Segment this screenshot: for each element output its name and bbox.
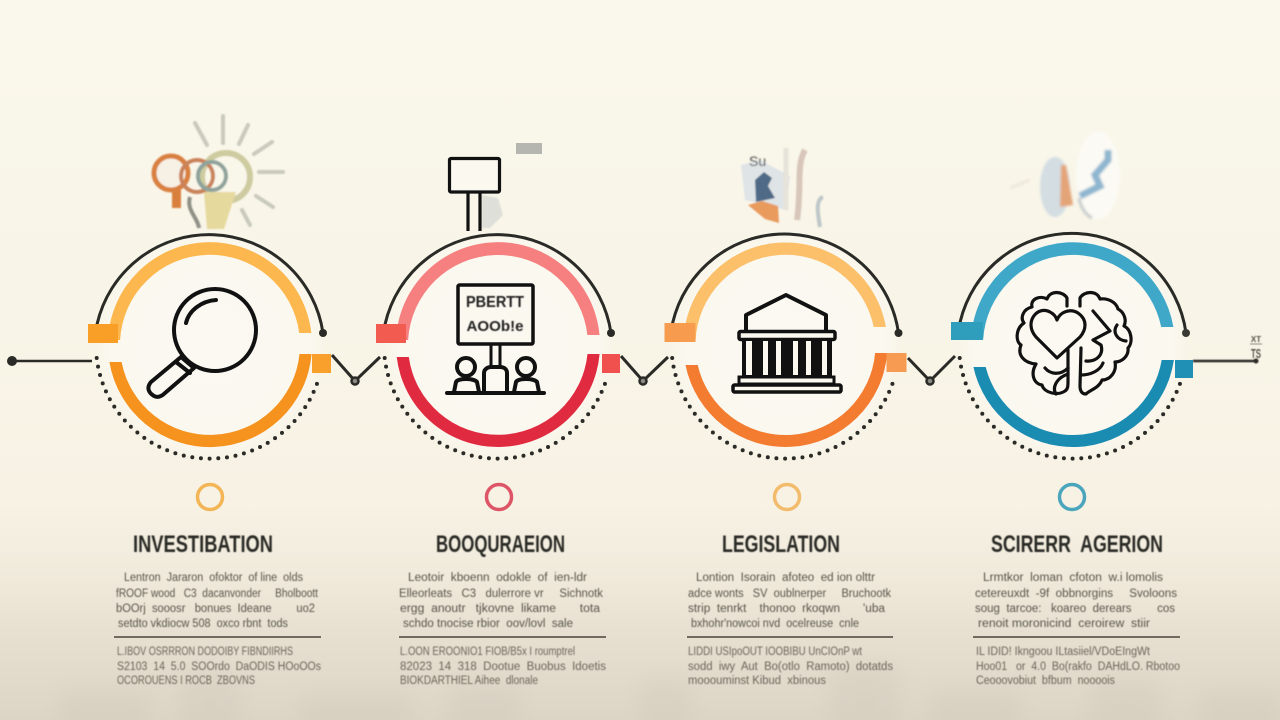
connector 1 to 2 [332,355,380,384]
icon: brain with heart [1017,292,1131,394]
right timeline end: XT [1251,335,1261,344]
footnote text: Hoo01 or 4.0 Bo(rakfo DAHdLO. Rbotoo [976,661,1180,673]
panel: scientific stage [951,229,1193,687]
icon: magnifying glass [148,289,256,397]
marker ring [198,484,222,510]
marker ring [486,484,512,510]
icon: placard and audience: AOOb!e [466,318,524,335]
footnote text: S2103 14 5.0 SOOrdo DaODIS HOoOOs [117,661,321,673]
hazy skyline [60,665,1280,720]
panel: legislation stage [664,229,906,687]
decoration: collage of figures [741,148,823,227]
ring: scientific [951,229,1193,461]
body text: bxhohr'nowcoi nvd ocelreuse cnle [691,618,859,630]
ring: education [376,229,620,461]
panel: education stage [376,229,620,687]
footnote text [400,646,606,687]
footnote text: Ceooovobiut bfbum noooois [976,675,1115,687]
footnote text: IL IDID! Ikngoou ILtasiiel/VDoEIngWt [976,646,1151,658]
panel: investigation stage [88,229,331,687]
body text: Lentron Jararon ofoktor of line olds [124,572,303,584]
footnote text [976,646,1180,687]
marker ring [1060,484,1084,510]
icon: government building [733,295,841,392]
body text: setdto vkdiocw 508 oxco rbnt tods [118,618,288,630]
footnote text: L.OON EROONIO1 FIOB/B5x I roumptrel [400,646,575,658]
connector 2 to 3 [621,356,668,384]
heading: BOOQURAEION [436,531,565,558]
decoration: collage of figures: Su [749,153,766,169]
body text [688,572,891,630]
body text: adce wonts SV oublnerper Bruchootk [688,588,891,600]
heading: INVESTIBATION [133,531,273,558]
body text: schdo tnocise rbior oov/lovl sale [403,618,573,630]
body text [116,572,319,630]
footnote text: 82023 14 318 Dootue Buobus Idoetis [400,661,606,673]
heading: SCIRERR AGERION [991,531,1163,558]
body text: Leotoir kboenn odokle of ien-ldr [408,572,587,584]
body text: fROOF wood C3 dacanvonder Bholboott [116,588,319,600]
ring: legislation [664,229,906,461]
body text [399,572,603,630]
right timeline end [1193,335,1262,364]
decoration: light bulb and rings [154,116,283,229]
icon: placard and audience [447,285,544,393]
body text: strip tenrkt thonoo rkoqwn 'uba [688,603,886,615]
heading: LEGISLATION [722,531,840,558]
decoration: abstract collage [1010,131,1120,219]
icon: placard and audience: PBERTT [466,294,524,311]
left timeline start [7,356,92,366]
connector 3 to 4 [908,356,955,384]
footnote text: L.IBOV OSRRRON DODOIBY FIBNDIIRHS [117,646,293,658]
body text: cetereuxdt -9f obbnorgins Svoloons [975,588,1177,600]
footnote text [117,646,321,687]
footnote text: sodd iwy Aut Bo(otlo Ramoto) dotatds [688,661,893,673]
body text: Lrmtkor loman cfoton w.i lomolis [983,572,1163,584]
footnote text [688,646,893,687]
footnote text: mooouminst Kibud xbinous [688,675,826,687]
marker ring [774,484,800,510]
body text [975,572,1177,630]
body text: ergg anoutr tjkovne likame tota [400,603,601,615]
body text: soug tarcoe: koareo derears cos [975,603,1175,615]
body text: bOOrj sooosr bonues Ideane uo2 [116,603,315,615]
right timeline end: TS [1251,346,1261,361]
footnote text: LIDDI USIpoOUT IOOBIBU UnCIOnP wt [688,646,863,658]
body text: Elleorleats C3 dulerrore vr Sichnotk [399,588,603,600]
body text: renoit moronicind ceroirew stiir [978,618,1150,630]
body text: Lontion Isorain afoteo ed ion olttr [696,572,875,584]
footnote text: BIOKDARTHIEL Aihee dlonale [400,675,538,687]
ring: investigation [88,229,331,461]
decoration: sign post [450,143,542,231]
footnote text: OCOROUENS I ROCB ZBOVNS [117,675,255,687]
